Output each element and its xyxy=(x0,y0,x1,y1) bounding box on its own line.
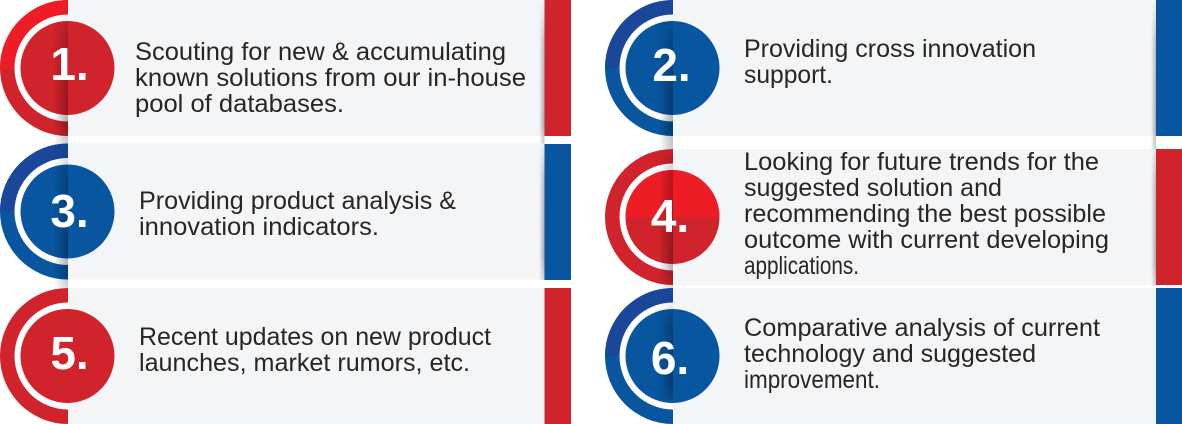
number 6: 6. xyxy=(651,332,689,384)
ring: item 1 xyxy=(0,0,68,136)
panel: item 4 xyxy=(605,136,1182,288)
text: item 1: Scouting for new & accumulating xyxy=(135,38,506,66)
text: item 1: pool of databases. xyxy=(135,90,344,118)
text: item 5 xyxy=(139,323,491,377)
number 1: 1. xyxy=(50,38,89,90)
text: item 2: Providing cross innovation xyxy=(744,35,1036,63)
text: item 3: Providing product analysis & xyxy=(139,187,456,215)
number 2: 2. xyxy=(652,39,691,91)
number 5: 5. xyxy=(50,327,89,379)
text: item 4 xyxy=(744,148,1109,280)
ring: item 6 xyxy=(605,288,673,424)
number 3: 3. xyxy=(50,185,89,237)
text: item 4: outcome with current developing xyxy=(744,226,1109,254)
text: item 6: improvement. xyxy=(744,366,880,394)
text: item 4: suggested solution and xyxy=(744,174,1002,202)
text: item 6 xyxy=(744,314,1100,394)
text: item 4: applications. xyxy=(744,252,859,280)
panel: item 5 xyxy=(0,288,571,424)
panel: item 3 xyxy=(0,136,571,288)
ring: item 3 xyxy=(0,144,68,280)
panel: item 2 xyxy=(605,0,1182,150)
ring: item 5 xyxy=(0,288,68,424)
text: item 5: Recent updates on new product xyxy=(139,323,491,351)
text: item 6: technology and suggested xyxy=(744,340,1036,368)
text: item 2 xyxy=(744,35,1036,89)
ring: item 2 xyxy=(605,0,673,136)
text: item 4: recommending the best possible xyxy=(744,200,1106,228)
text: item 4: Looking for future trends for the xyxy=(744,148,1099,176)
text: item 1 xyxy=(135,38,526,118)
panel: item 1 xyxy=(0,0,571,146)
text: item 1: known solutions from our in-house xyxy=(135,64,526,92)
text: item 3: innovation indicators. xyxy=(139,213,379,241)
text: item 5: launches, market rumors, etc. xyxy=(139,349,470,377)
number 4: 4. xyxy=(651,190,689,242)
panel: item 6 xyxy=(605,288,1182,424)
text: item 3 xyxy=(139,187,456,241)
text: item 6: Comparative analysis of current xyxy=(744,314,1100,342)
text: item 2: support. xyxy=(744,61,833,89)
ring: item 4 xyxy=(605,149,673,285)
